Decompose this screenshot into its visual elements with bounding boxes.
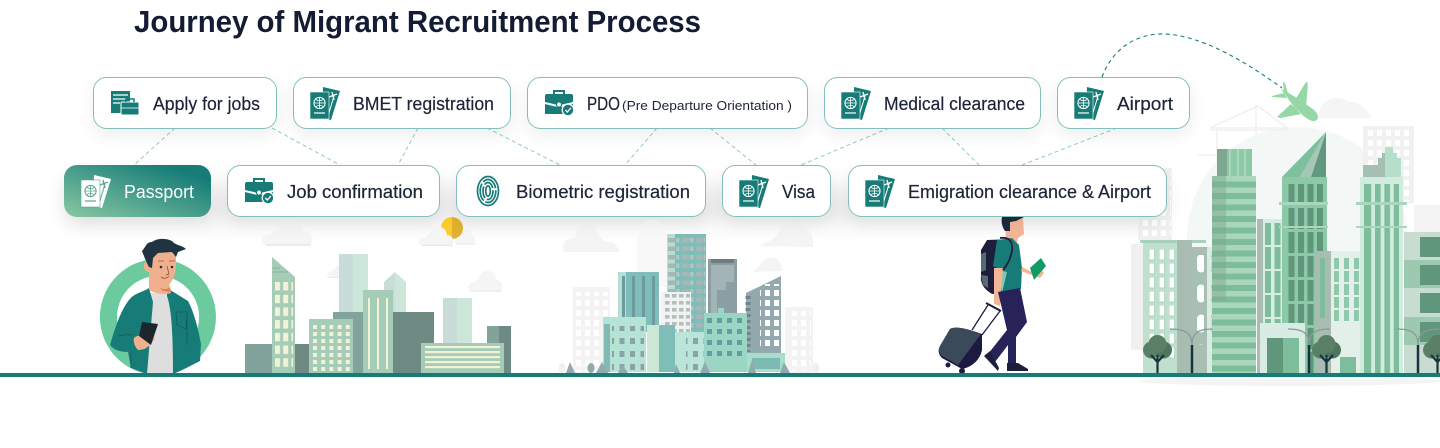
step: Airport [1058, 78, 1190, 128]
step: BMET registration [294, 78, 510, 128]
flight path arrow [1102, 34, 1282, 88]
step: PDO: (Pre Departure Orientation ) [622, 98, 792, 113]
step: Medical clearance [824, 78, 1040, 128]
step: Emigration clearance and Airport: Emigration clearance & Airport [908, 182, 1151, 202]
building: brick rowhouse [1140, 240, 1241, 373]
building: mid block [1315, 251, 1367, 373]
icon: airplane [1272, 82, 1318, 121]
icon: briefcase check [245, 179, 274, 204]
icon: passport [865, 175, 895, 208]
step: Emigration clearance and Airport [848, 166, 1166, 216]
building: tall tower [1356, 147, 1407, 373]
icon: passport [739, 175, 769, 208]
illustration: traveller with suitcase [939, 217, 1046, 374]
suitcase [939, 303, 1001, 374]
cloud: beside the sun [419, 227, 453, 245]
city illustration: right skyline [1140, 132, 1440, 373]
step: Job confirmation: Job confirmation [287, 182, 423, 202]
cloud: small centre [327, 264, 351, 278]
step: PDO: PDO [587, 94, 620, 114]
cloud: upper left [262, 219, 313, 245]
step: Biometric registration [456, 166, 706, 216]
step: Airport: Airport [1117, 94, 1173, 114]
street lamps [1170, 329, 1440, 373]
step: Apply for jobs: Apply for jobs [153, 94, 260, 114]
step: Visa [722, 166, 830, 216]
icon: briefcase check [545, 91, 574, 116]
ground line [0, 373, 1440, 377]
soft shadow band below the step boxes [70, 190, 1160, 224]
cloud: beside the sun, small right [455, 229, 475, 244]
title: Journey of Migrant Recruitment Process [134, 4, 701, 39]
icon: document and briefcase [111, 91, 139, 115]
building: right edge [1404, 232, 1440, 373]
ring behind person [100, 259, 216, 375]
step: Medical clearance: Medical clearance [884, 94, 1025, 114]
icon: passport [310, 87, 340, 120]
step: Passport (active): Passport [124, 182, 194, 202]
icon: passport white [81, 175, 111, 208]
icon: fingerprint [478, 176, 498, 206]
building: glass block [1257, 219, 1293, 373]
cloud: right [468, 271, 502, 291]
building: striped tower [1212, 149, 1256, 373]
trees [1143, 335, 1440, 373]
icon: passport [1074, 87, 1104, 120]
connector lines between steps [134, 128, 1117, 165]
city illustration: centre skyline [558, 220, 820, 373]
illustration: person with phone [100, 239, 216, 375]
city illustration: left skyline [245, 217, 511, 373]
step: Job confirmation [228, 166, 440, 216]
step: BMET registration: BMET registration [353, 94, 494, 114]
step: Apply for jobs [94, 78, 276, 128]
icon: sun [441, 217, 463, 239]
icon: passport [841, 87, 871, 120]
step: Passport (active) [64, 165, 211, 217]
background: pale city backdrop right [1131, 98, 1440, 386]
building: entrance podium [1260, 323, 1305, 373]
building: spire tower [1279, 132, 1328, 373]
step: PDO [528, 78, 808, 128]
step: Biometric registration: Biometric registration [516, 182, 690, 202]
step: Visa: Visa [782, 182, 816, 202]
